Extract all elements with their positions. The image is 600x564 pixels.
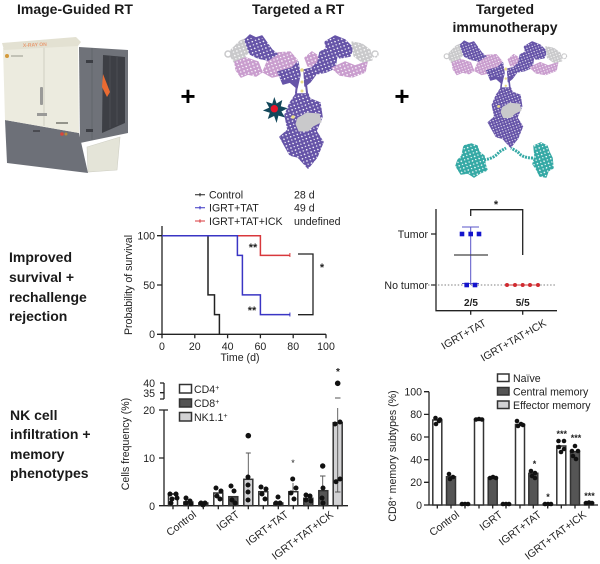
chart: CD8 memory subtypes: 40: [410, 454, 422, 466]
legend: cell types: CD4: [194, 384, 215, 396]
chart: CD8 memory subtypes: memory subtypes (%): [387, 390, 399, 496]
text: NK cell infiltration: phenotypes: [10, 465, 89, 481]
legend: survival groups: [195, 190, 341, 228]
chart: cells frequency: IGRT: [215, 509, 242, 534]
chart: CD8 memory subtypes: 0: [416, 500, 422, 512]
chart: cells frequency: *: [336, 367, 340, 378]
chart: CD8 memory subtypes: IGRT+TAT+ICK: [523, 509, 589, 563]
legend: cell types: +: [223, 413, 228, 420]
data points: blue group: [460, 232, 481, 287]
chart: cells frequency: 35: [143, 388, 155, 400]
chart: tumor rechallenge: 5/5: [516, 298, 530, 309]
chart: CD8 memory subtypes: 20: [410, 477, 422, 489]
chart: CD8 memory subtypes: *: [533, 459, 537, 469]
chart: tumor rechallenge: [384, 199, 557, 364]
legend: cell types: NK1.1: [194, 412, 223, 424]
chart: CD8 memory subtypes: IGRT: [478, 509, 505, 534]
text: NK cell infiltration: NK cell: [10, 407, 57, 423]
chart: survival curves: 100: [317, 341, 335, 353]
chart: CD8 memory subtypes: ***: [584, 491, 595, 501]
data dots: [168, 380, 342, 508]
chart: CD8 memory subtypes: 80: [410, 409, 422, 421]
antibody: targeted immunotherapy: [444, 41, 567, 178]
chart: tumor rechallenge: Tumor: [398, 229, 428, 241]
legend: survival groups: IGRT+TAT: [209, 202, 259, 214]
chart: cells frequency: 0: [149, 501, 155, 513]
legend: memory subtypes: [498, 373, 591, 412]
chart: cells frequency: 40: [143, 378, 155, 390]
chart: CD8 memory subtypes: Control: [427, 509, 462, 539]
chart: survival curves: 0: [149, 329, 155, 341]
bars: [433, 419, 594, 505]
chart: CD8 memory subtypes: 100: [404, 386, 422, 398]
chart: cells frequency: IGRT+TAT+ICK: [270, 509, 336, 563]
icon: irradiator machine: X-RAY ON: [23, 42, 47, 49]
chart: tumor rechallenge: 2/5: [464, 298, 478, 309]
legend: survival groups: 28 d: [294, 190, 315, 202]
chart: tumor rechallenge: IGRT+TAT+ICK: [479, 317, 548, 364]
chart: survival curves: 20: [189, 341, 201, 353]
chart: survival curves: 80: [287, 341, 299, 353]
title: Targeted immunotherapy: immunotherapy: [452, 19, 558, 35]
chart: survival curves: *: [320, 262, 325, 274]
legend: cell types: +: [215, 399, 219, 406]
chart: cells frequency: Control: [164, 509, 199, 539]
chart: CD8 memory subtypes: [387, 373, 598, 563]
chart: tumor rechallenge: No tumor: [384, 280, 428, 292]
chart: CD8 memory subtypes: IGRT+TAT: [497, 509, 544, 548]
legend: cell types: [180, 384, 228, 424]
legend: survival groups: undefined: [294, 216, 341, 228]
icon: plus 1: +: [180, 81, 196, 111]
chart: CD8 memory subtypes: ***: [556, 429, 567, 439]
text: improved survival: Improved: [9, 249, 72, 265]
title: Targeted immunotherapy: Targeted: [476, 1, 534, 17]
legend: survival groups: Control: [209, 190, 243, 202]
chart: survival curves: Probability of survival: [123, 235, 135, 335]
data dots: [433, 416, 594, 506]
text: NK cell infiltration: infiltration +: [10, 426, 90, 442]
chart: cells frequency: 10: [143, 453, 155, 465]
icon: plus 2: +: [394, 81, 410, 111]
chart: survival curves: **: [249, 242, 258, 254]
legend: memory subtypes: Naïve: [513, 373, 541, 385]
antibody: targeted alpha RT: [225, 35, 378, 168]
chart: survival curves: **: [248, 305, 257, 317]
teal domain right: [511, 143, 554, 178]
title: Image-Guided RT: Image-Guided RT: [17, 1, 133, 17]
text: improved survival: survival +: [9, 269, 74, 285]
chart: cells frequency: Cells frequency (%): [120, 398, 132, 490]
chart: survival curves: 60: [255, 341, 266, 353]
chart: CD8 memory subtypes: +: [388, 496, 395, 500]
chart: tumor rechallenge: *: [494, 199, 499, 211]
chart: tumor rechallenge: IGRT+TAT: [439, 317, 489, 352]
legend: survival groups: 49 d: [294, 202, 315, 214]
chart: survival curves: Time (d): [220, 352, 260, 364]
chart: cells frequency: 20: [143, 405, 155, 417]
chart: CD8 memory subtypes: *: [546, 492, 550, 502]
chart: survival curves: [123, 190, 341, 364]
chart: survival curves: 0: [159, 341, 165, 353]
chart: cells frequency: *: [291, 458, 295, 468]
chart: cells frequency: IGRT+TAT: [244, 509, 291, 548]
bars: [168, 423, 342, 506]
icon: irradiator machine: [2, 37, 128, 173]
data points: red group: [505, 283, 540, 287]
chart: cells frequency: [120, 367, 348, 563]
icon: radionuclide star: [263, 97, 288, 123]
text: improved survival: rechallenge: [9, 289, 87, 305]
chart: CD8 memory subtypes: 60: [410, 432, 422, 444]
chart: CD8 memory subtypes: ***: [571, 433, 582, 443]
teal domain left: [455, 143, 506, 178]
text: improved survival: rejection: [9, 308, 67, 324]
text: NK cell infiltration: memory: [10, 446, 65, 462]
legend: cell types: +: [215, 385, 219, 392]
chart: survival curves: 100: [137, 230, 155, 242]
legend: cell types: CD8: [194, 398, 215, 410]
legend: survival groups: IGRT+TAT+ICK: [209, 216, 283, 228]
title: Targeted a RT: Targeted a RT: [252, 1, 345, 17]
legend: memory subtypes: Effector memory: [513, 400, 591, 412]
chart: survival curves: 40: [222, 341, 234, 353]
chart: CD8 memory subtypes: CD8: [387, 500, 399, 522]
chart: survival curves: 50: [143, 280, 155, 292]
legend: memory subtypes: Central memory: [513, 386, 589, 398]
